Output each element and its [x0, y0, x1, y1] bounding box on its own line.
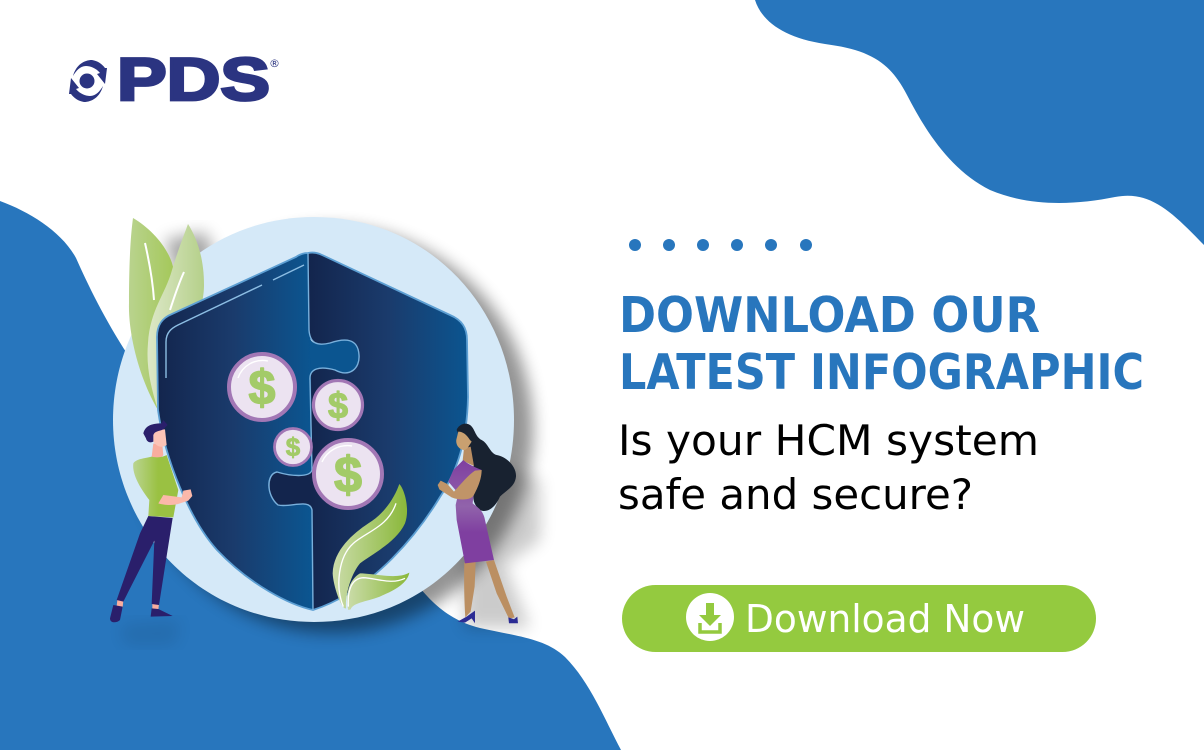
man: hair [143, 420, 168, 442]
registered mark: ® [269, 57, 280, 70]
front leaves [333, 484, 409, 610]
man: shoes [110, 605, 173, 622]
man: trousers [117, 516, 173, 605]
button: download now [622, 585, 1096, 652]
woman: neck [463, 447, 474, 466]
man: face [153, 429, 167, 447]
person: man [110, 420, 192, 622]
heading [619, 287, 1144, 401]
woman: dress [448, 460, 494, 563]
blue blob: top right [755, 0, 1204, 245]
man: shirt [133, 455, 178, 517]
shield: puzzle seam tab fill [309, 335, 359, 380]
woman: arm [438, 470, 482, 499]
shield [157, 253, 468, 610]
icon: download [686, 593, 734, 641]
coins [229, 354, 382, 508]
coin 4 [314, 440, 382, 508]
subheading [618, 416, 1039, 519]
coin 1 [229, 354, 295, 420]
coin 2 [314, 380, 362, 430]
heading: DOWNLOAD OUR [619, 287, 1040, 344]
leaf: right [147, 224, 204, 410]
decorative dots [629, 239, 812, 251]
icon: eye with arrows [69, 60, 107, 102]
shield: outline and seam [157, 253, 468, 610]
subheading: Is your HCM system [618, 416, 1039, 465]
coin 4: $ [334, 447, 362, 503]
man: neck [152, 443, 163, 458]
coin 3 [274, 428, 312, 466]
leaf: small [347, 573, 409, 610]
woman: face [456, 432, 472, 450]
logo wordmark: PDS [117, 46, 270, 113]
woman: hair [457, 424, 516, 511]
coin 2: $ [328, 385, 348, 426]
back leaves [129, 218, 204, 410]
button label: Download Now [745, 597, 1025, 641]
coin 1: $ [249, 362, 276, 415]
logo: PDS [69, 46, 280, 113]
heading: LATEST INFOGRAPHIC [619, 344, 1144, 401]
woman: legs [464, 560, 515, 619]
drop shadows of illustration [120, 227, 540, 645]
woman: shoes [458, 611, 518, 623]
subheading: safe and secure? [618, 470, 973, 519]
man: ankles [117, 600, 159, 610]
man: arm [158, 489, 192, 505]
shield: left half [157, 253, 313, 610]
coin 3: $ [286, 432, 301, 462]
pale blue circle [113, 217, 514, 622]
leaf: left [129, 218, 190, 410]
person: woman [438, 424, 518, 623]
leaf: large [333, 484, 407, 608]
shield: right half [270, 253, 468, 610]
blue blob: bottom left [0, 201, 621, 750]
